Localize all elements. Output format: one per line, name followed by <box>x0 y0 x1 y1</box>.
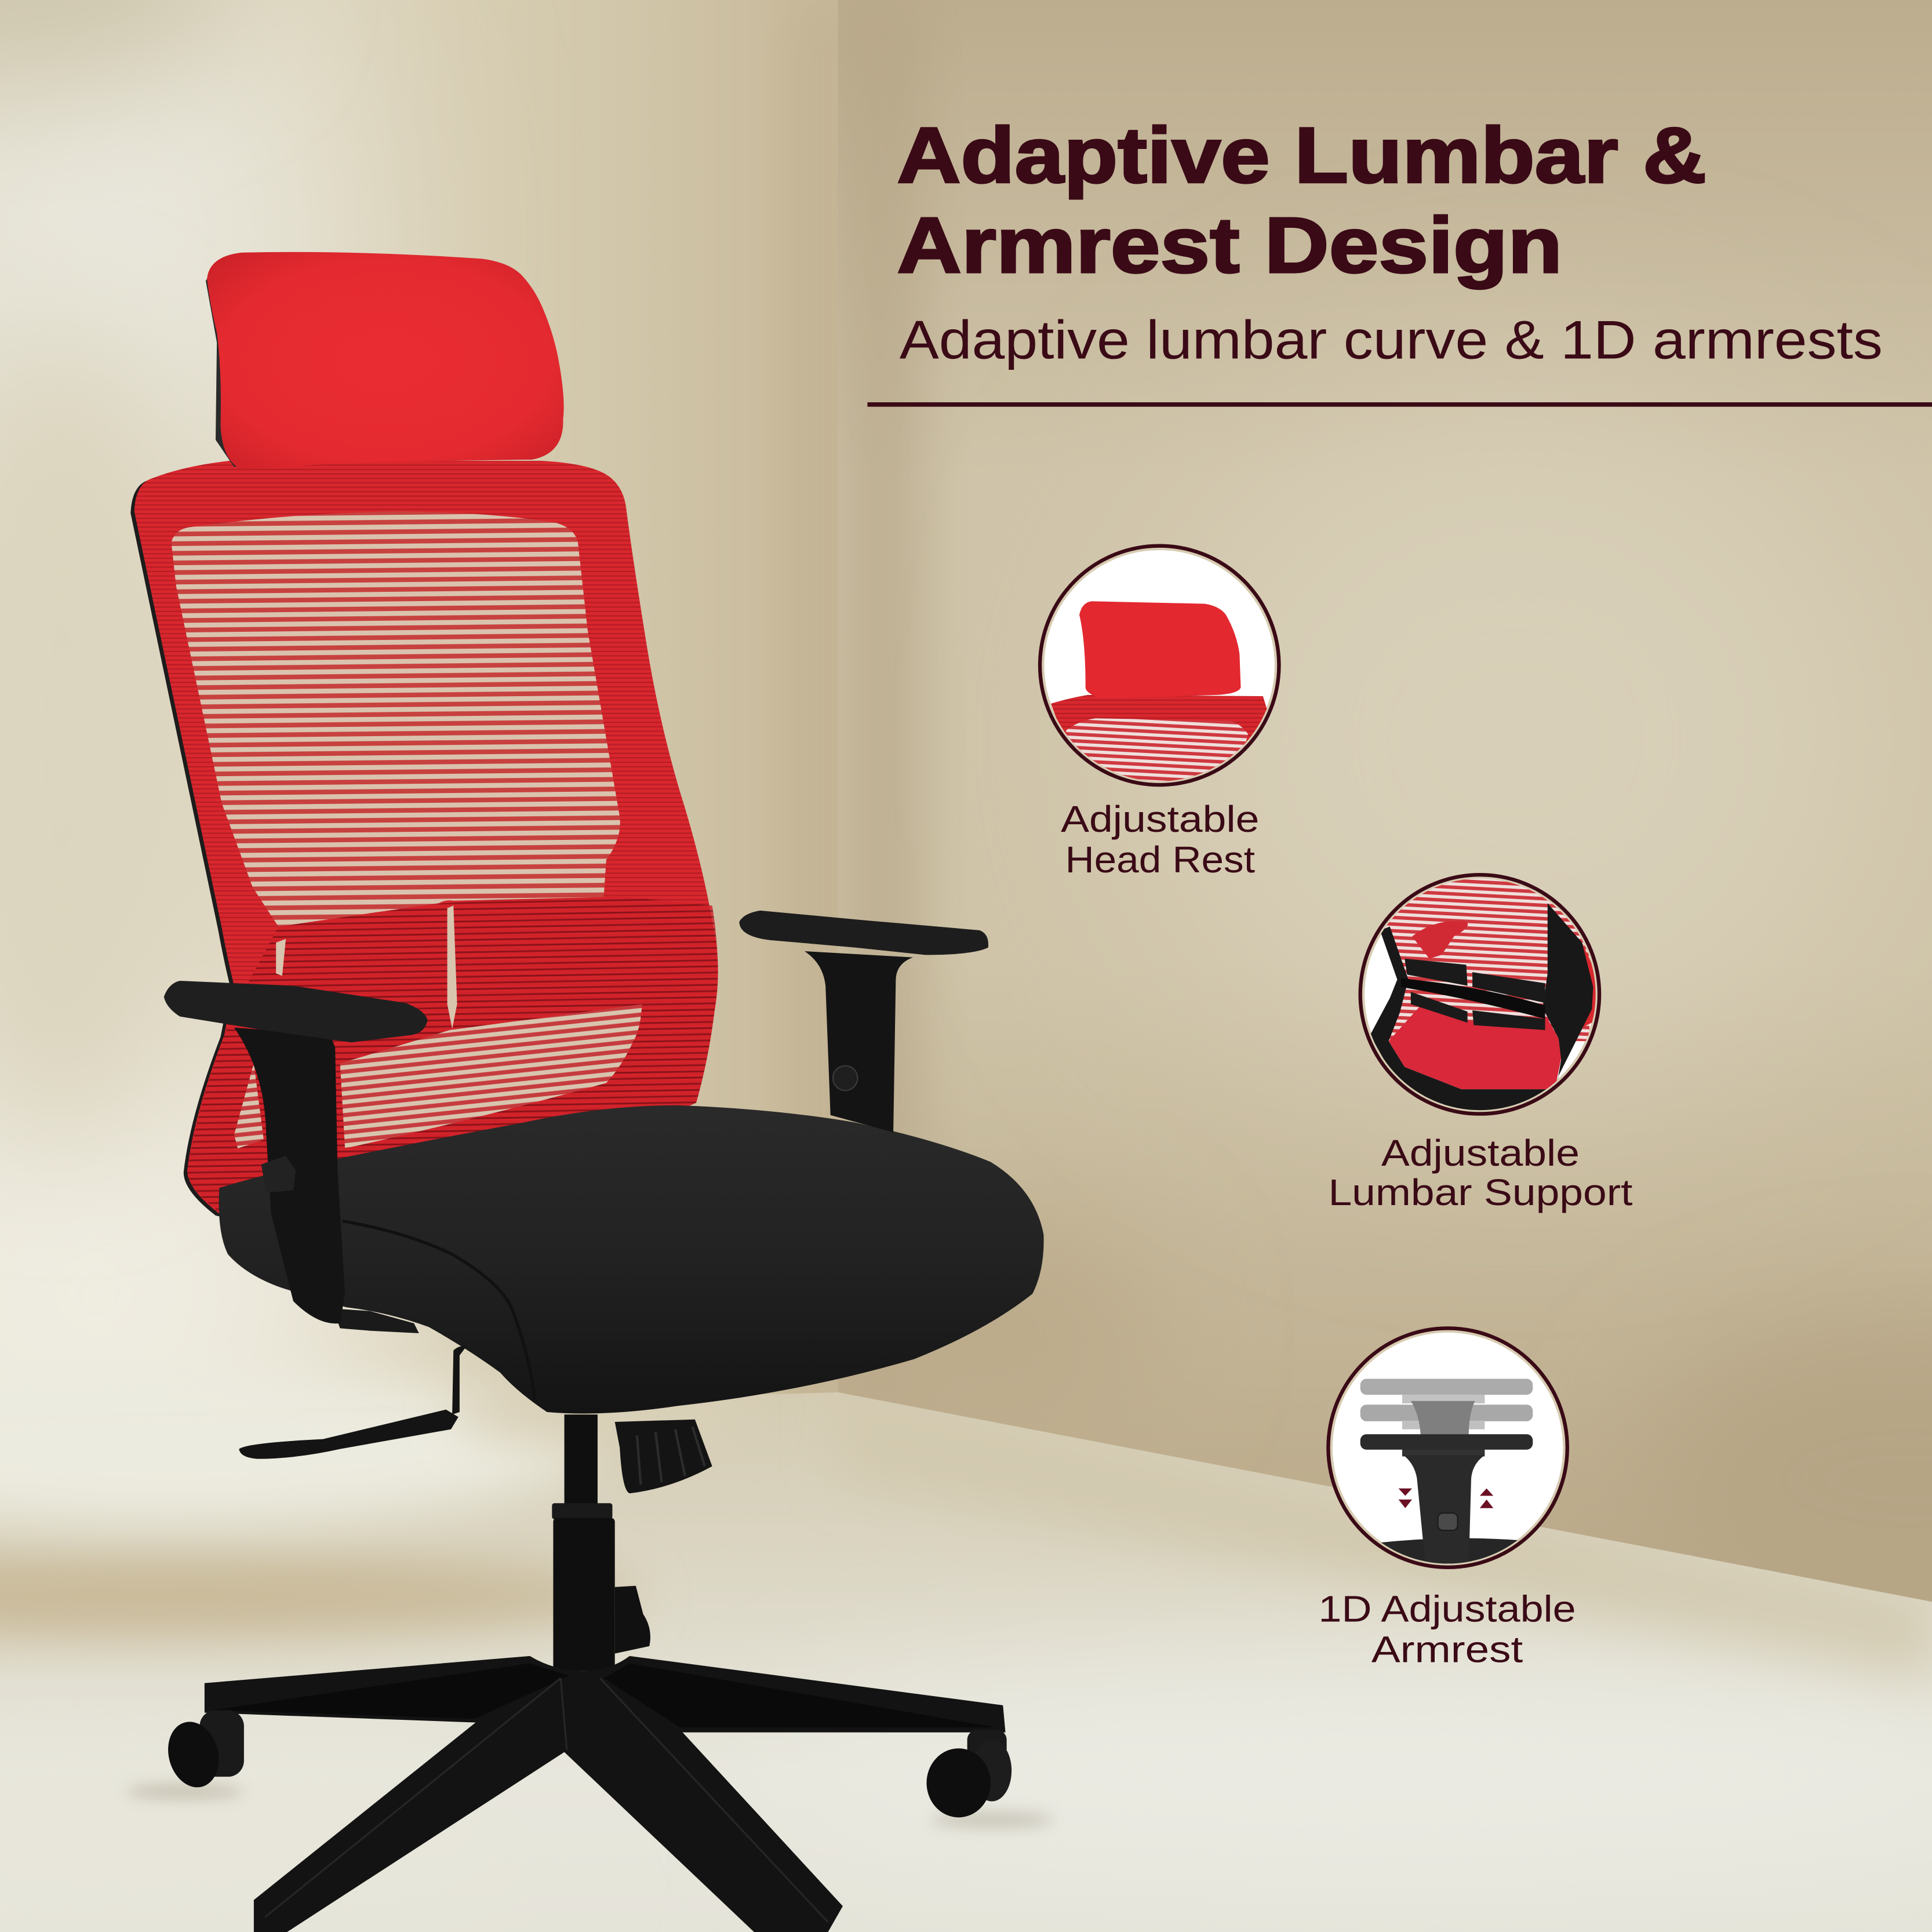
right caster <box>926 1730 1012 1817</box>
right wall <box>813 0 1932 1639</box>
lumbar zone dark mesh <box>187 894 718 1214</box>
icon: lumbar circle <box>1360 863 1602 1121</box>
subtitle: Adaptive lumbar curve & 1D armrests <box>900 310 1883 370</box>
icon: headrest circle <box>1040 546 1279 788</box>
label: adjustable head rest <box>1061 798 1259 881</box>
left caster <box>161 1710 244 1793</box>
label: 1D adjustable armrest: Armrest <box>1371 1628 1523 1670</box>
feature: adjustable head rest <box>1040 546 1279 881</box>
title <box>897 111 1707 289</box>
seat <box>219 1105 1044 1414</box>
title: Adaptive Lumbar & <box>897 111 1707 199</box>
feature: 1D adjustable armrest <box>1318 1328 1576 1670</box>
soft wall to floor transition on the left <box>0 1371 752 1524</box>
label: adjustable head rest: Head Rest <box>1065 839 1255 881</box>
chair <box>126 252 1053 1932</box>
label: adjustable lumbar support: Adjustable <box>1381 1132 1580 1174</box>
floor <box>0 1392 1932 1932</box>
upper mesh window <box>171 511 620 926</box>
five-star base <box>205 1656 1006 1932</box>
lumbar pad slits <box>276 905 457 1029</box>
label: adjustable lumbar support: Lumbar Support <box>1328 1171 1633 1213</box>
front armrest <box>164 981 428 1323</box>
label: adjustable lumbar support <box>1328 1132 1633 1213</box>
rear armrest <box>739 911 988 1132</box>
icon: armrest circle <box>1328 1328 1567 1577</box>
seat mechanism <box>333 1308 419 1333</box>
seat back mesh <box>130 461 718 1222</box>
headrest <box>206 252 564 470</box>
label: 1D adjustable armrest: 1D Adjustable <box>1318 1588 1576 1629</box>
label: adjustable head rest: Adjustable <box>1061 798 1259 840</box>
tilt lever <box>239 1345 467 1459</box>
label: 1D adjustable armrest <box>1318 1588 1576 1670</box>
gas cylinder <box>552 1414 615 1671</box>
title: Armrest Design <box>897 201 1562 289</box>
feature: adjustable lumbar support <box>1328 863 1633 1213</box>
height adjustment knob <box>615 1420 712 1493</box>
caster shadows <box>126 1784 1053 1827</box>
lower mesh window <box>340 1004 642 1148</box>
rear base leg <box>615 1586 650 1654</box>
left wall <box>0 0 838 1399</box>
